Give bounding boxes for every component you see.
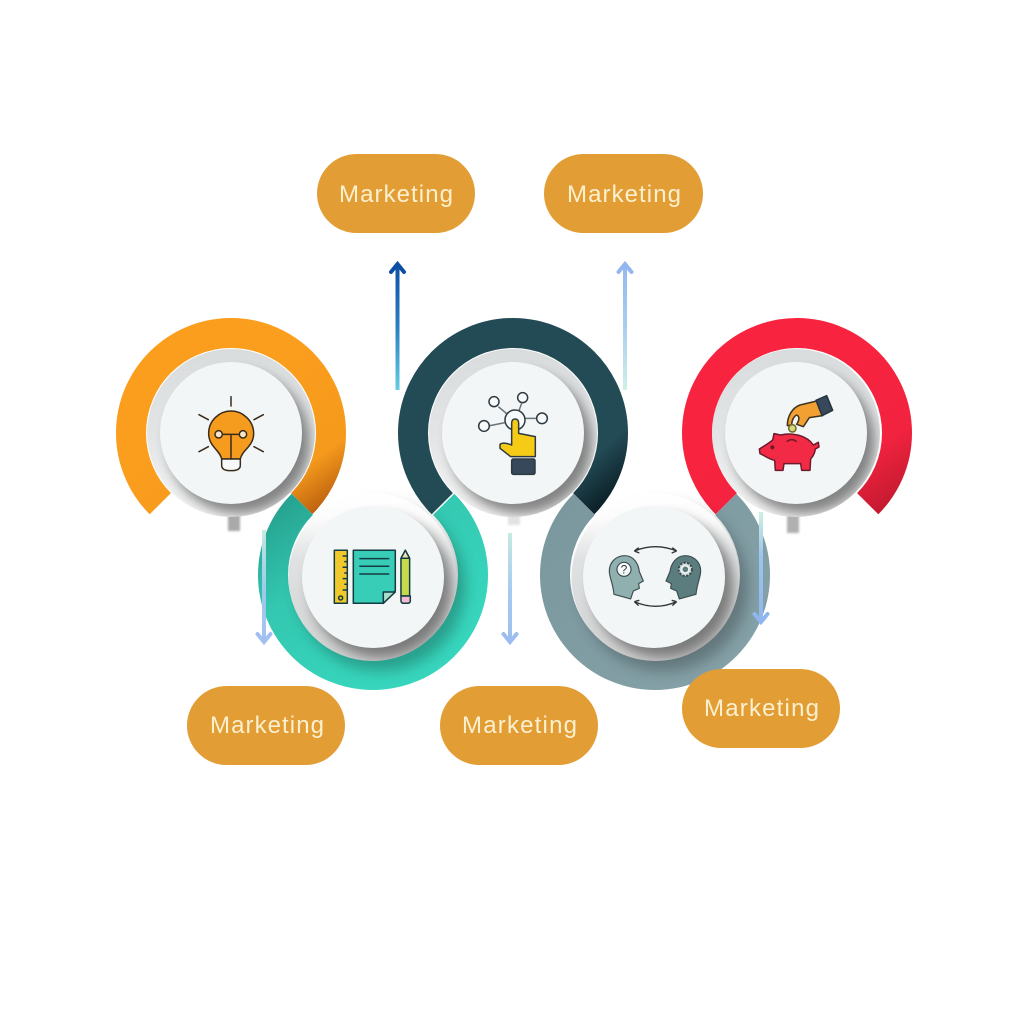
icon: brain exchange heads (609, 547, 701, 606)
arrow: up light blue (618, 264, 632, 390)
infographic diagram (116, 154, 912, 765)
button: orange circle (147, 349, 315, 531)
label pill: bottom left (187, 686, 345, 765)
ring: red (697, 333, 897, 504)
ring: teal (273, 504, 473, 675)
label pill: top left: Marketing (339, 181, 453, 208)
label pill: bottom right: Marketing (704, 695, 819, 722)
ring: dark teal (413, 333, 613, 504)
button: slate circle (572, 493, 748, 671)
arrow: down right (754, 512, 768, 622)
label pill: top right: Marketing (567, 181, 681, 208)
arrow: down middle (504, 533, 516, 642)
button: teal circle (288, 493, 465, 671)
ring: orange (131, 333, 331, 504)
icon: light bulb (199, 397, 263, 471)
label pill: top left (317, 154, 475, 233)
arrow: down left (258, 530, 270, 642)
icon: ruler, note and pencil (334, 550, 410, 603)
icon: hand touching network (479, 393, 547, 474)
label pill: top right (544, 154, 703, 233)
icon: piggy bank and coin (759, 396, 833, 470)
ring: slate (555, 504, 755, 675)
label pill: bottom middle: Marketing (462, 712, 577, 739)
button: dark circle (429, 349, 597, 525)
label pill: bottom middle (440, 686, 598, 765)
button: red circle (712, 349, 880, 533)
label pill: bottom left: Marketing (210, 712, 324, 739)
icon: brain exchange heads: ? (621, 563, 628, 577)
arrow: up dark blue (391, 264, 404, 390)
label pill: bottom right (682, 669, 840, 748)
